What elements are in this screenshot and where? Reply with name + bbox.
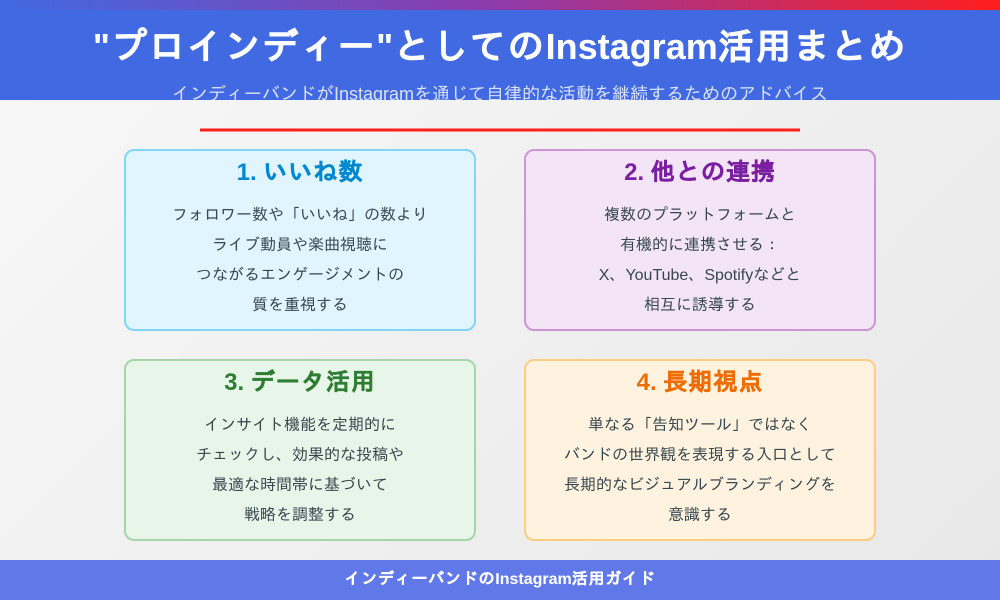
footer: インディーバンドのInstagram活用ガイド: [345, 571, 655, 588]
text block: 4: バンドの世界観を表現する入口として: [564, 447, 836, 464]
panel: 1. likes: [124, 149, 476, 331]
text block: 4: 長期的なビジュアルブランディングを: [564, 477, 836, 494]
text block: 4: [564, 416, 836, 524]
text block: 1: 質を重視する: [252, 297, 348, 314]
heading: 4: 4. 長期視点: [637, 369, 763, 396]
footer: [0, 560, 1000, 600]
text block: 2: X、YouTube、Spotifyなどと: [599, 267, 801, 284]
text block: 3: チェックし、効果的な投稿や: [196, 447, 404, 464]
panel: 4. long-term: [524, 359, 876, 541]
text block: 2: [599, 206, 801, 314]
panel: 2. collaboration: [524, 149, 876, 331]
heading: 3: 3. データ活用: [224, 369, 376, 396]
text block: 4: 意識する: [668, 507, 732, 524]
text block: 1: フォロワー数や「いいね」の数より: [172, 207, 428, 224]
text block: 3: [196, 416, 404, 524]
top gradient bar: [0, 0, 1000, 10]
title: "プロインディー"としてのInstagram活用まとめ: [93, 26, 907, 67]
text block: 3: 戦略を調整する: [244, 507, 356, 524]
heading: 1: 1. いいね数: [237, 159, 363, 186]
text block: 1: つながるエンゲージメントの: [196, 267, 404, 284]
red divider line: [200, 128, 800, 132]
panel: 3. data: [124, 359, 476, 541]
text block: 2: 有機的に連携させる：: [620, 237, 780, 254]
text block: 3: 最適な時間帯に基づいて: [212, 477, 388, 494]
text block: 3: インサイト機能を定期的に: [204, 417, 396, 434]
heading: 2: 2. 他との連携: [624, 159, 776, 186]
text block: 2: 複数のプラットフォームと: [604, 207, 796, 224]
text block: 1: ライブ動員や楽曲視聴に: [212, 237, 388, 254]
text block: 4: 単なる「告知ツール」ではなく: [588, 417, 812, 434]
text block: 2: 相互に誘導する: [644, 297, 756, 314]
text block: 1: [172, 206, 428, 314]
